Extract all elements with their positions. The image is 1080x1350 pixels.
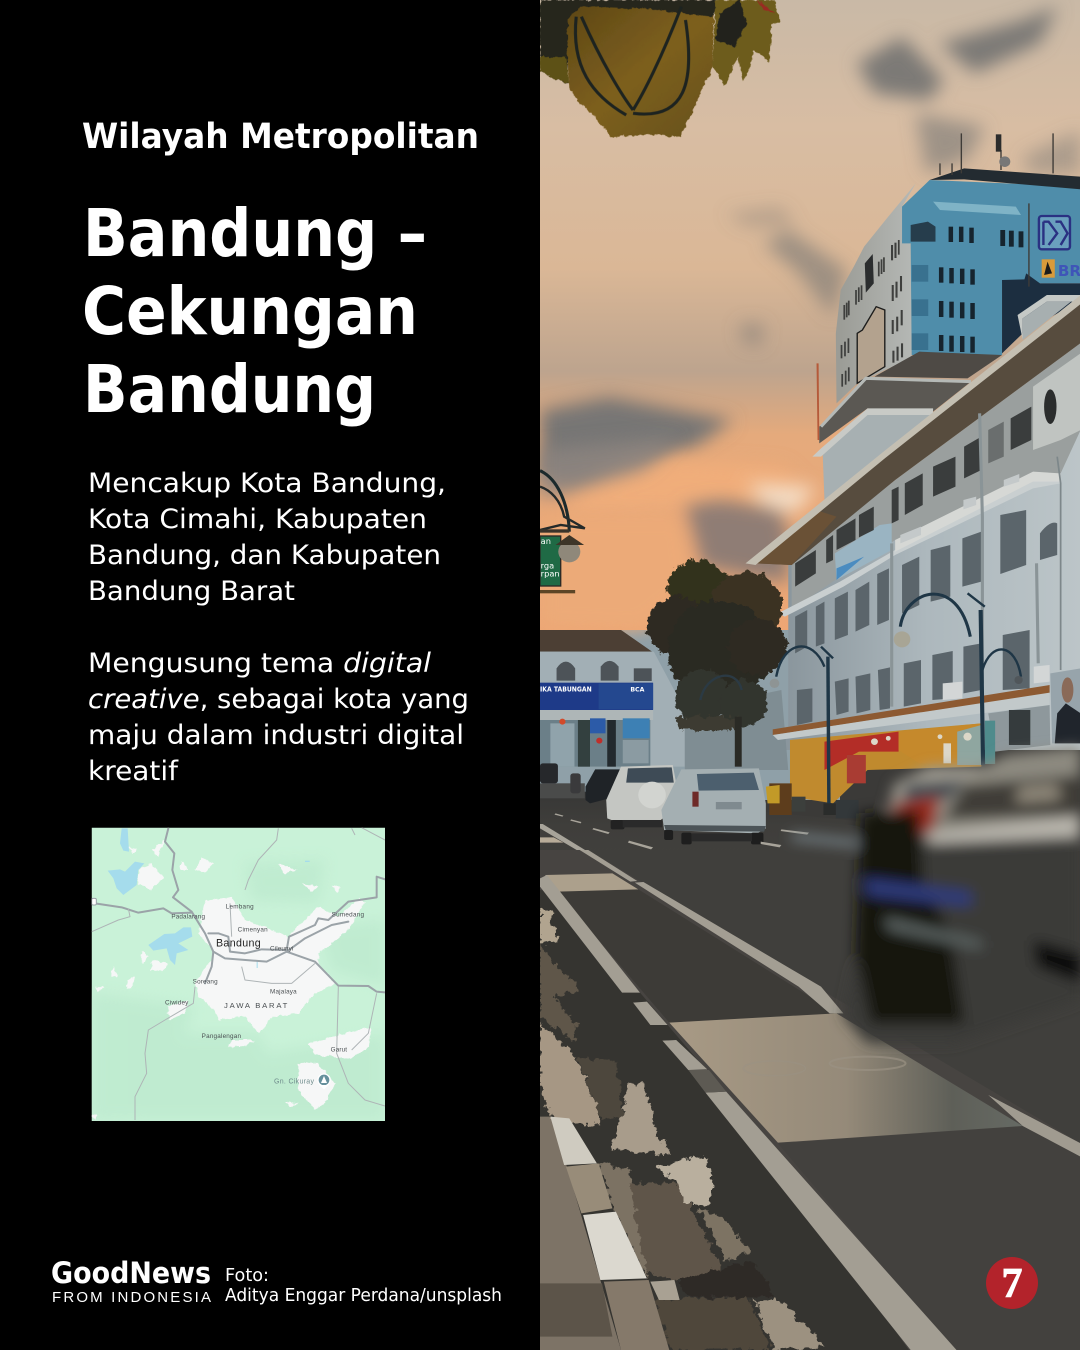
text block: coverage: Mencakup Kota Bandung, bbox=[88, 468, 446, 499]
street lamps bbox=[700, 593, 1021, 810]
ornate lamp and green sign: rga bbox=[541, 561, 554, 571]
map place labels: Padalarang bbox=[171, 914, 205, 921]
road foreground bbox=[540, 847, 1080, 1350]
title: Bandung – bbox=[83, 195, 427, 272]
road dashes bbox=[540, 813, 809, 850]
title: Bandung bbox=[83, 351, 376, 428]
street scene bbox=[540, 296, 1080, 850]
map place labels: Lembang bbox=[226, 903, 254, 910]
text block: coverage: Bandung Barat bbox=[88, 576, 295, 607]
map place labels: Gn. Cikuray bbox=[274, 1078, 314, 1085]
white SUV bbox=[606, 765, 676, 829]
map of Bandung region bbox=[92, 828, 385, 1121]
logo: GoodNews from Indonesia bbox=[51, 1256, 211, 1306]
clouds bbox=[540, 7, 1080, 510]
map place labels bbox=[165, 903, 364, 1085]
map place labels: Cimenyan bbox=[238, 927, 268, 934]
road surface bbox=[540, 792, 607, 800]
logo: GoodNews from Indonesia: FROM INDONESIA bbox=[52, 1289, 211, 1306]
BRI logo bbox=[1039, 216, 1070, 249]
text block: theme bbox=[88, 648, 469, 787]
sidewalk slabs bbox=[540, 1117, 621, 1350]
map place labels: Garut bbox=[331, 1047, 347, 1054]
text block: theme: creative, sebagai kota yang bbox=[88, 684, 469, 715]
subtitle: Wilayah Metropolitan bbox=[82, 117, 479, 157]
logo: GoodNews from Indonesia: GoodNews bbox=[51, 1256, 211, 1290]
billboard: BCA bbox=[630, 687, 645, 694]
map place labels: Cileunyi bbox=[270, 945, 293, 952]
left building with billboard bbox=[540, 630, 685, 767]
ornate lamp and green sign: an bbox=[541, 536, 551, 546]
page number badge: 7 bbox=[1002, 1261, 1022, 1307]
icon: mountain pin bbox=[317, 1073, 331, 1089]
text block: coverage: Bandung, dan Kabupaten bbox=[88, 540, 441, 571]
photo credit: Aditya Enggar Perdana/unsplash bbox=[225, 1285, 502, 1306]
map place labels: JAWA BARAT bbox=[224, 1001, 288, 1010]
motion-blurred vehicles bbox=[792, 747, 1080, 1043]
map place labels: Ciwidey bbox=[165, 1000, 189, 1007]
map place labels: Sumedang bbox=[332, 912, 364, 919]
background panel bbox=[0, 0, 540, 1350]
text block: theme: maju dalam industri digital bbox=[88, 720, 464, 751]
building behind tree bbox=[685, 690, 788, 770]
title bbox=[82, 195, 427, 428]
lantern bbox=[540, 0, 780, 137]
page number badge bbox=[986, 1257, 1038, 1309]
map place labels: Pangalengan bbox=[202, 1033, 241, 1040]
silver car bbox=[661, 768, 766, 844]
broken road paint bbox=[540, 907, 826, 1350]
photo: Bandung street at dusk bbox=[540, 0, 1080, 1350]
photo credit bbox=[225, 1265, 502, 1306]
billboard: IKA TABUNGAN bbox=[540, 685, 592, 694]
map place labels: Soreang bbox=[193, 979, 218, 986]
crosswalk patches bbox=[545, 873, 1023, 1143]
clouds near sunset bbox=[540, 437, 816, 630]
text block: coverage: Kota Cimahi, Kabupaten bbox=[88, 504, 427, 535]
mid-rise roof and terrace bbox=[812, 295, 1080, 500]
poster bbox=[1050, 668, 1080, 743]
text block: theme: kreatif bbox=[88, 756, 180, 787]
map place labels: Bandung bbox=[216, 938, 261, 950]
billboard bbox=[540, 683, 653, 710]
tree bbox=[647, 560, 787, 730]
lane lines bbox=[540, 850, 957, 1350]
distant traffic bbox=[540, 763, 836, 815]
BRI tower bbox=[817, 133, 1080, 440]
ornate lamp and green sign bbox=[540, 471, 585, 593]
mural bbox=[790, 723, 981, 803]
curb stones bbox=[540, 1117, 680, 1350]
ornate lamp and green sign: rpan bbox=[541, 569, 560, 579]
building facade bbox=[746, 295, 1080, 750]
map place labels: Majalaya bbox=[270, 988, 297, 995]
text block: theme: Mengusung tema digital bbox=[88, 648, 432, 679]
text block: coverage bbox=[88, 468, 446, 607]
photo credit: Foto: bbox=[225, 1265, 269, 1286]
title: Cekungan bbox=[82, 273, 418, 350]
